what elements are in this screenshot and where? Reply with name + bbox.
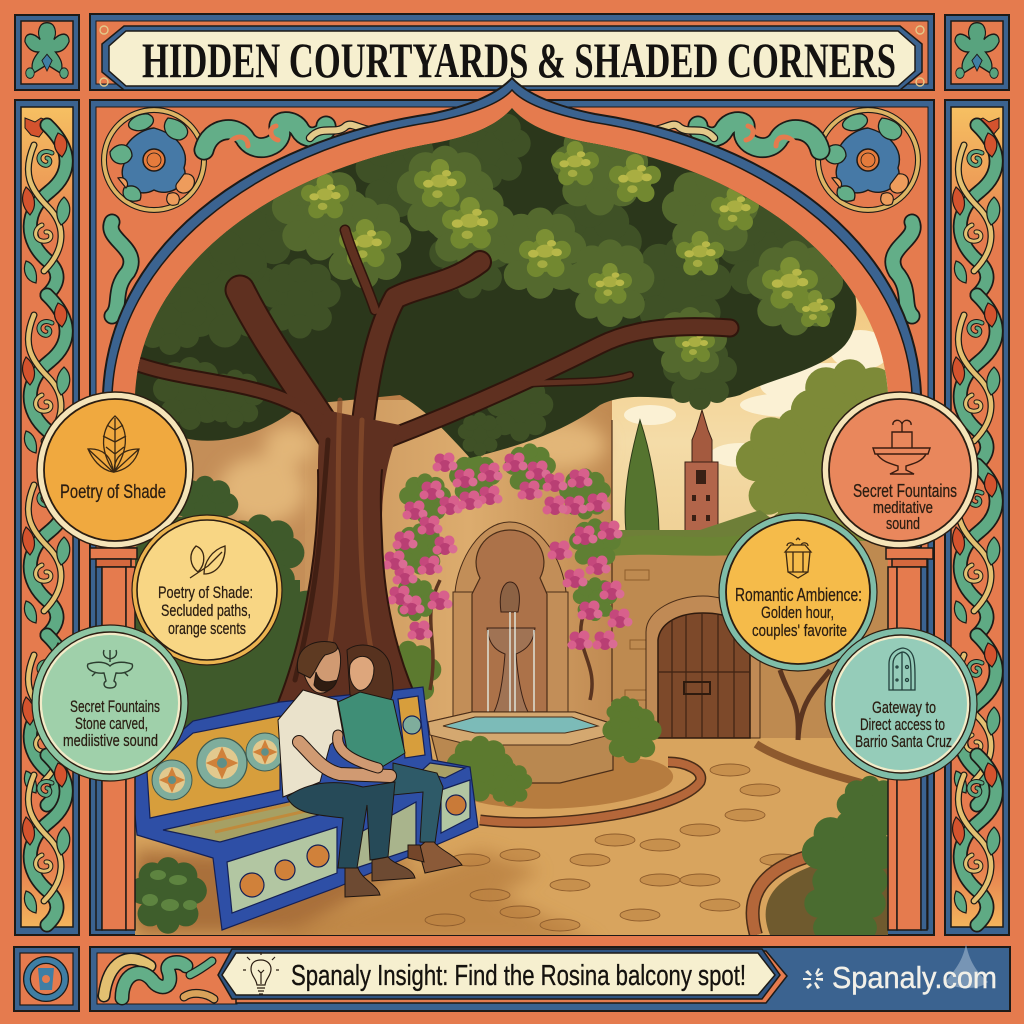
bench back tiles <box>147 716 280 818</box>
main frame with arch <box>90 78 934 935</box>
callout: gateway: Gateway to <box>872 698 936 717</box>
icon: leaf sprig <box>190 546 225 578</box>
callout: secret fountains orange <box>822 392 978 548</box>
curb and dirt <box>470 740 888 935</box>
right wall <box>612 541 888 741</box>
right pillar <box>886 548 933 930</box>
callout: gateway: Barrio Santa Cruz <box>855 732 952 751</box>
icon: carved fountain <box>87 650 133 688</box>
logo watermark <box>945 944 988 988</box>
tree canopy <box>130 100 856 458</box>
callout: poetry of shade detail: Poetry of Shade: <box>158 583 253 602</box>
icon: lantern <box>785 538 811 578</box>
sky <box>612 280 888 530</box>
distant hills <box>620 510 770 538</box>
callout: poetry of shade detail: orange scents <box>168 619 246 638</box>
fountain statue and bowl <box>500 582 519 612</box>
spandrel ornament right <box>636 110 918 316</box>
wall creeper <box>612 541 737 556</box>
icon: arched door <box>889 648 915 690</box>
tree trunk and branches <box>140 230 730 735</box>
arms <box>299 735 390 776</box>
callout: secret fountains green: Secret Fountains <box>70 697 160 716</box>
couple <box>278 642 462 897</box>
bottom right plants <box>802 776 888 935</box>
icon: light bulb <box>243 952 279 994</box>
bottom banner: Spanaly Insight: Find the Rosina balcony spot! <box>291 960 746 992</box>
right background tree <box>736 359 888 541</box>
path stones <box>425 764 820 931</box>
callout: secret fountains orange: Secret Fountains <box>853 481 957 501</box>
callout: secret fountains green: Stone carved, <box>75 714 148 733</box>
arch band <box>103 78 921 548</box>
bushes near fountain <box>375 641 662 806</box>
callout: gateway: Direct access to <box>860 715 945 734</box>
bougainvillea <box>382 443 632 700</box>
distant tower <box>685 410 718 534</box>
callout: poetry of shade title <box>37 392 193 548</box>
bottom left corner tile <box>14 947 79 1011</box>
callout: romantic ambience: couples' favorite <box>752 621 847 640</box>
callout: poetry of shade detail <box>132 515 282 665</box>
small tree <box>780 670 830 740</box>
icon: fountain <box>873 420 930 474</box>
logo: Spanaly.com <box>832 960 997 995</box>
callout: gateway <box>825 628 977 780</box>
callout: secret fountains orange: sound <box>886 514 920 533</box>
clouds <box>624 330 900 467</box>
left pillar <box>90 548 137 930</box>
top left corner tile <box>15 15 79 90</box>
bench <box>131 687 478 930</box>
top right corner tile <box>945 15 1009 90</box>
bench front tiles <box>227 827 337 913</box>
foreground ground <box>135 738 888 938</box>
banner ornament <box>104 959 214 999</box>
callout: romantic ambience: Golden hour, <box>761 603 834 622</box>
distant cypress <box>625 420 659 532</box>
callout: secret fountains orange: meditative <box>873 498 933 517</box>
door <box>646 596 760 738</box>
callout: romantic ambience <box>719 513 877 671</box>
man <box>278 642 415 897</box>
title frame <box>90 14 934 90</box>
right ornamental column <box>945 100 1009 935</box>
fountain niche <box>453 522 568 725</box>
callout: romantic ambience: Romantic Ambience: <box>735 585 862 605</box>
callout: secret fountains green <box>32 625 188 781</box>
bottom banner <box>90 944 1010 1011</box>
sunlit patches <box>218 421 606 524</box>
courtyard scene <box>123 100 924 948</box>
left wall <box>305 400 612 738</box>
icon: leaves <box>88 416 139 472</box>
spandrel ornament left <box>104 110 388 316</box>
callout: secret fountains green: mediistive sound <box>63 731 158 750</box>
bench seat <box>162 801 319 843</box>
woman <box>338 645 462 873</box>
callout: poetry of shade detail: Secluded paths, <box>161 601 251 620</box>
callout: poetry of shade title: Poetry of Shade <box>60 481 166 503</box>
far left bushes <box>135 476 308 728</box>
bench plant <box>129 857 207 934</box>
left ornamental column <box>15 100 79 935</box>
basin <box>428 712 613 783</box>
